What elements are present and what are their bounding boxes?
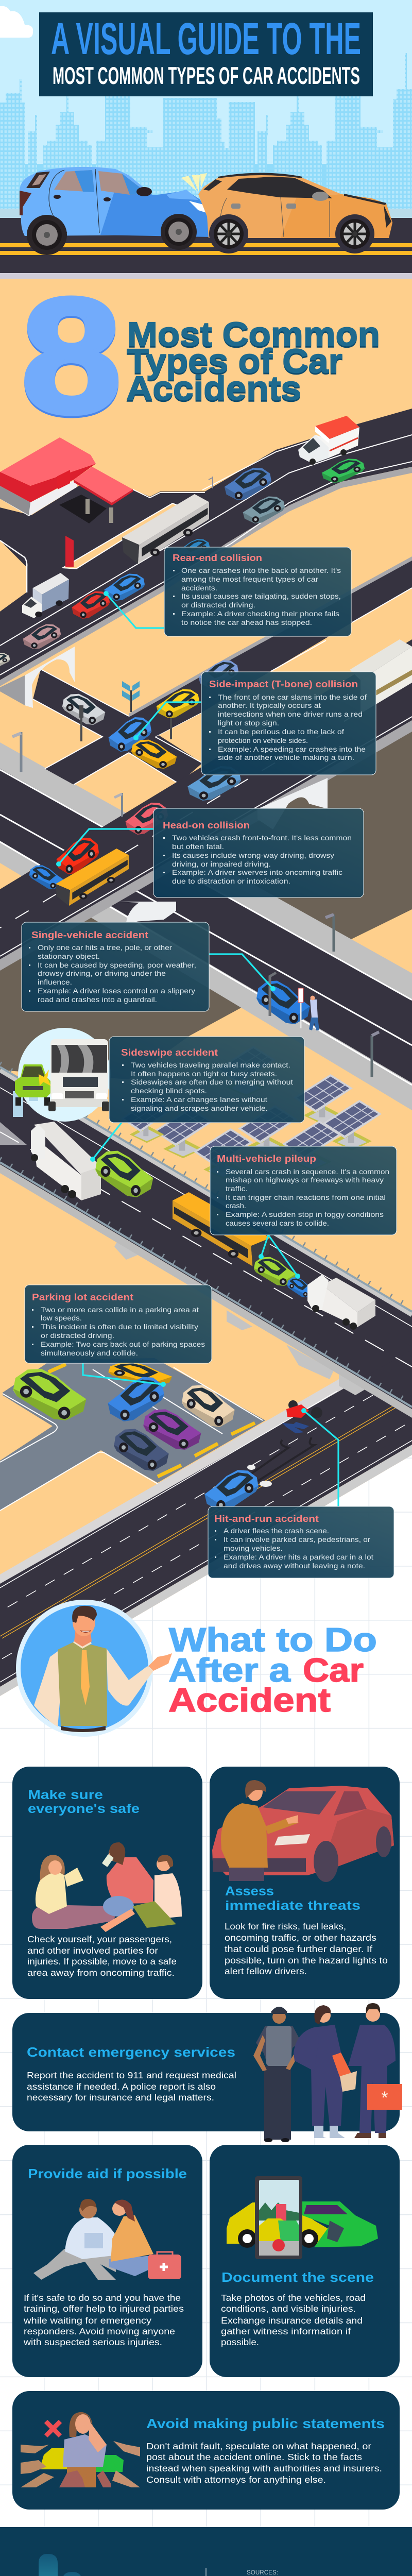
heading: What to Do After a Car Accident: Accident <box>168 1681 331 1719</box>
truck highway <box>0 1070 412 1409</box>
main elevated road <box>0 639 412 959</box>
yellow taxi <box>157 689 199 718</box>
connector end dots <box>56 591 306 1413</box>
bullet list: but often fatal. <box>172 843 224 851</box>
card title: Contact emergency services <box>27 2044 235 2060</box>
blue van lower road <box>187 766 241 801</box>
hero scene: sky, city and road <box>0 0 412 279</box>
illustration: yellow and green cars <box>227 2201 378 2248</box>
panel title: Side-impact (T-bone) collision <box>209 679 358 689</box>
card: assess immediate threats <box>210 1767 400 1999</box>
bullet list: Sideswipes are often due to merging without <box>131 1078 293 1086</box>
card: avoid making public statements <box>12 2391 400 2510</box>
person holding head <box>309 995 319 1030</box>
asphalt road <box>0 218 412 273</box>
roadside price sign <box>65 536 74 567</box>
title banner <box>39 12 373 96</box>
card text: If it's safe to do so and you have the <box>24 2293 181 2303</box>
big numeral 8: 8 <box>21 264 122 447</box>
police car <box>225 468 271 500</box>
forecourt and highway asphalt <box>0 409 412 680</box>
bullet list: and drives away without leaving a note. <box>224 1562 365 1570</box>
blue van (rear-end crash) <box>104 574 145 601</box>
first aid bag <box>367 2084 402 2110</box>
card text: Report the accident to 911 and request medical <box>27 2070 236 2080</box>
panel title: Sideswipe accident <box>121 1047 218 1058</box>
sideswipe illustration <box>13 1028 111 1122</box>
card: document the scene <box>210 2145 400 2377</box>
bullet list: A driver flees the crash scene. <box>224 1527 329 1535</box>
card title: Avoid making public statements <box>146 2416 385 2431</box>
bullet list: signaling and scrapes another vehicle. <box>131 1105 268 1112</box>
white truck (pileup) <box>307 1275 375 1330</box>
lime SUV front <box>15 1064 51 1106</box>
bullet list: Example: A sudden stop in foggy conditions <box>226 1211 384 1218</box>
heading text shadow: Accidents <box>126 370 301 409</box>
illustration: man and red car <box>212 1780 394 1882</box>
bullet list: among the most frequent types of car <box>181 575 319 583</box>
hair <box>72 1606 97 1623</box>
bullet list: protection on vehicle sides. <box>218 737 308 744</box>
bullet list: moving vehicles. <box>224 1545 283 1552</box>
navy car <box>114 1429 169 1471</box>
bullet list: Example: A driver swerves into oncoming traffic <box>172 869 342 876</box>
connector: head-on <box>59 829 153 864</box>
bullet list <box>209 693 367 761</box>
card text: with suspected serious injuries. <box>23 2337 162 2347</box>
card text <box>27 1934 177 1978</box>
panel title: Head-on collision <box>163 820 250 831</box>
gray car <box>243 497 285 523</box>
card title <box>225 1884 360 1913</box>
bullet list: drowsy driving, or driving under the <box>38 970 166 977</box>
heading text shadow: Types of Car <box>127 343 342 381</box>
green car <box>322 459 365 483</box>
fleeing blue van <box>204 1470 259 1511</box>
circle fill <box>21 1605 148 1732</box>
bullet list: crash. <box>226 1202 246 1210</box>
bullet list <box>29 944 196 1004</box>
card text: necessary for insurance and legal matters. <box>27 2092 214 2103</box>
city silhouette <box>13 1080 38 1117</box>
bullet list: simultaneously and collide. <box>41 1349 138 1357</box>
logo: RMD Law <box>38 2554 179 2576</box>
illustration: phone photographing the scene <box>255 2176 302 2259</box>
cloud <box>0 6 33 38</box>
bullet list: It can be perilous due to the lack of <box>218 728 344 736</box>
beige car <box>0 653 10 670</box>
connector: side-impact <box>136 702 201 738</box>
sky <box>0 0 412 209</box>
heading: What to Do After a Car Accident: What to Do <box>169 1621 377 1658</box>
panel: multi-vehicle pileup <box>210 1146 397 1235</box>
crashed blue car <box>256 980 310 1024</box>
bullet list: It often happens on tight or busy streets. <box>131 1070 277 1078</box>
first aid kit <box>148 2252 181 2279</box>
bullet list: It can involve parked cars, pedestrians, or <box>224 1536 371 1544</box>
store roof <box>0 437 96 486</box>
green van (sideswipe) <box>95 1151 153 1197</box>
skid marks <box>237 1437 314 1484</box>
beige car <box>182 1385 235 1427</box>
card text: Take photos of the vehicles, road <box>221 2293 366 2303</box>
bullet list: light or stop sign. <box>218 719 279 727</box>
card text: Don't admit fault, speculate on what happened, or <box>146 2441 371 2451</box>
silver car <box>62 694 105 725</box>
panel: sideswipe accident <box>109 1037 304 1123</box>
bullet list: The front of one car slams into the side of <box>218 693 367 701</box>
card text <box>27 2070 236 2103</box>
panel title: Multi-vehicle pileup <box>217 1154 316 1164</box>
blue car (pileup) <box>287 1277 313 1297</box>
card text: instead when speaking with authorities and insurers. <box>146 2463 382 2473</box>
street lamps <box>12 732 122 817</box>
yellow road lines <box>0 243 412 255</box>
single-vehicle accident scene <box>256 914 379 1077</box>
panel: single-vehicle accident <box>22 922 209 1011</box>
backdrop circle <box>18 1028 111 1122</box>
bullet list: Its causes include wrong-way driving, drowsy <box>172 852 334 859</box>
circle border <box>16 1600 153 1737</box>
bullet list: One car crashes into the back of another. It's <box>181 567 341 574</box>
card title: Assess <box>225 1884 274 1899</box>
card text: Consult with attorneys for anything else. <box>146 2475 326 2485</box>
icon: impact burst <box>181 173 207 192</box>
vest <box>58 1642 107 1726</box>
card text <box>225 1921 388 1976</box>
panel: parking lot accident <box>25 1285 212 1363</box>
bullet list: Two vehicles traveling parallel make contact. <box>131 1061 290 1069</box>
logo bars <box>39 2554 106 2576</box>
bullet list: or distracted driving. <box>41 1332 114 1340</box>
illustration: woman surrounded by reporters <box>21 2412 140 2487</box>
card title: Document the scene <box>221 2269 374 2285</box>
card text: assistance if needed. A police report is also <box>27 2081 216 2092</box>
bullet list: low speeds. <box>41 1314 82 1322</box>
hit-and-run scene <box>204 1400 322 1511</box>
bullet list: intersections when one driver runs a red <box>218 710 363 718</box>
illustration: blue car in collision <box>20 167 211 255</box>
bullet list: Several cars crash in sequence. It's a common <box>226 1168 389 1176</box>
card: contact emergency services <box>12 2003 402 2142</box>
right arm <box>107 1649 153 1706</box>
yellow car (T-bone crash) <box>131 740 177 769</box>
card text <box>23 2293 184 2347</box>
heading: What to Do After a Car Accident <box>168 1621 377 1719</box>
bullet list: Example: A driver hits a parked car in a lot <box>224 1553 373 1561</box>
card: make sure everyone's safe <box>12 1767 202 1999</box>
card title: Make sure <box>28 1788 103 1802</box>
truck road guard rails and piers <box>0 1063 412 1418</box>
map: bottom road <box>0 1350 412 1696</box>
bullet list: Example: A driver checking their phone fails <box>181 610 339 618</box>
panel: rear-end collision <box>164 547 351 636</box>
street lamp <box>209 477 213 488</box>
lamp hit by car <box>270 973 276 1016</box>
ambulance <box>298 416 359 465</box>
white articulated truck <box>31 1122 101 1200</box>
injured rider <box>282 1422 309 1433</box>
bullet list: driving, or impaired driving. <box>172 860 271 868</box>
lane lines <box>0 425 412 675</box>
card text: while waiting for emergency <box>23 2315 151 2326</box>
sidewalk strip <box>0 209 412 218</box>
bullet list <box>163 834 352 885</box>
yellow bus <box>56 849 129 906</box>
panel title: Single-vehicle accident <box>31 930 148 940</box>
collar <box>73 1637 92 1649</box>
bullet list <box>215 1527 373 1570</box>
first aid bag: * <box>381 2088 388 2108</box>
panel: head-on collision <box>153 808 364 897</box>
vehicles on the truck highway <box>31 1122 375 1330</box>
illustration: gas station <box>0 437 213 567</box>
card text: Exchange insurance details and <box>221 2315 363 2326</box>
fallen motorcycle <box>286 1400 322 1418</box>
card text: responders. Avoid moving anyone <box>24 2326 175 2336</box>
card text: possible. <box>221 2337 259 2347</box>
bullet list: Example: A speeding car crashes into the <box>218 745 366 753</box>
card text: oncoming traffic, or other hazards <box>225 1933 376 1943</box>
card text: Look for fire risks, fuel leaks, <box>225 1921 346 1931</box>
card title: immediate threats <box>225 1899 360 1913</box>
bullet list: accidents. <box>181 584 217 592</box>
parking lot <box>0 1358 265 1511</box>
big numeral 8: 8 <box>21 266 122 449</box>
panel title: Hit-and-run accident <box>214 1514 319 1524</box>
blue car behind panel <box>177 539 210 559</box>
highway side wall <box>0 467 412 686</box>
illustration: three injured people <box>32 1842 182 1932</box>
bridge pillars <box>0 647 328 922</box>
bullet list <box>122 1061 293 1112</box>
left sleeve <box>34 1650 63 1727</box>
bullet list: side of another vehicle making a turn. <box>218 754 354 761</box>
bullet list: Example: Two cars back out of parking spaces <box>41 1341 205 1348</box>
bullet list: Example: A driver loses control on a slippery <box>38 987 195 995</box>
bullet list: mishap on highways or freeways with heavy <box>226 1176 384 1184</box>
sand wedge <box>63 503 178 569</box>
bullet list: another. It typically occurs at <box>218 702 321 709</box>
connector lines <box>59 594 338 1506</box>
bullet list: due to distraction or intoxication. <box>172 877 290 885</box>
yellow bus (pileup) <box>173 1192 270 1266</box>
panel: side-impact collision <box>201 672 376 775</box>
connector: parking lot <box>83 1363 163 1384</box>
blue car <box>108 1377 164 1421</box>
bullet list: Example: A car changes lanes without <box>131 1096 267 1104</box>
city skyline <box>0 53 412 210</box>
solar panels <box>121 1046 382 1179</box>
card text: injuries. If possible, move to a safe <box>27 1956 177 1967</box>
heading text shadow <box>126 316 380 409</box>
heading text: Most Common <box>127 315 380 353</box>
bullet list: road and crashes into a guardrail. <box>38 996 157 1004</box>
road curb <box>0 273 412 279</box>
card text: and other involved parties for <box>27 1945 158 1956</box>
card text: conditions, and visible injuries. <box>221 2303 356 2314</box>
bullet list: or distracted driving. <box>181 601 255 609</box>
connector: sideswipe <box>93 1123 122 1159</box>
card: provide aid if possible <box>12 2145 202 2377</box>
card title <box>28 1788 140 1816</box>
RV on the right <box>350 639 412 714</box>
bullet list: influence. <box>38 978 72 986</box>
city bus <box>122 494 209 564</box>
vehicles at the intersection <box>12 639 412 906</box>
bullet list: to notice the car ahead has stopped. <box>181 619 312 626</box>
canopy pillars <box>85 499 113 523</box>
lower highway gray shoulder <box>0 742 412 1110</box>
sand ground of the map <box>0 279 412 1696</box>
illustration: police officer <box>253 2007 301 2142</box>
store sign <box>57 470 70 489</box>
blue van (T-bone crash) <box>109 717 151 752</box>
shadow under canopy <box>59 495 107 523</box>
card title: everyone's safe <box>28 1802 140 1816</box>
connector: multi-vehicle <box>261 1235 298 1276</box>
footer <box>0 2527 412 2576</box>
bullet list: It can trigger chain reactions from one initial <box>226 1194 386 1201</box>
heading: What to Do After a Car Accident: After a <box>168 1651 291 1689</box>
bullet list: stationary object. <box>38 953 100 960</box>
heading text shadow: Most Common <box>127 316 380 354</box>
bullet list: traffic. <box>226 1185 248 1193</box>
card text: area away from oncoming traffic. <box>27 1968 175 1978</box>
no-parking sign <box>298 988 303 1028</box>
bullet list: It can be caused by speeding, poor weather, <box>38 961 196 969</box>
green van <box>13 1369 87 1420</box>
red van (head-on crash) <box>57 838 99 874</box>
bullet list: Two vehicles crash front-to-front. It's less common <box>172 834 352 842</box>
store roof front <box>0 464 96 502</box>
bullet list: checking blind spots. <box>131 1087 207 1095</box>
illustration: male paramedic <box>348 2003 402 2138</box>
connector: hit-and-run <box>304 1411 338 1506</box>
illustration: presenter man in circle <box>16 1600 172 1737</box>
illustration: orange car in collision <box>198 173 392 253</box>
heading text <box>126 315 380 407</box>
panel: hit-and-run accident <box>208 1506 394 1578</box>
connector: single-vehicle <box>209 954 273 989</box>
icon: red X mark <box>46 2421 60 2436</box>
illustration: female paramedic <box>294 2005 357 2138</box>
card text: possible, turn on the hazard lights to <box>225 1955 388 1965</box>
street lamps <box>325 914 379 1077</box>
upper winding road <box>0 409 412 686</box>
crossing sign post <box>122 681 140 712</box>
hand with keys <box>148 1653 172 1671</box>
canopy <box>74 467 133 503</box>
pink-red car <box>126 803 168 835</box>
heading text: Accidents <box>126 369 301 407</box>
exhaust smoke <box>247 1465 272 1487</box>
connector: rear-end <box>106 594 164 628</box>
card text: that could pose further danger. If <box>225 1944 372 1954</box>
card text <box>146 2441 382 2485</box>
card text <box>221 2293 366 2347</box>
purple car <box>143 1409 201 1450</box>
delivery truck <box>22 573 69 618</box>
illustration: woman helping injured man <box>33 2199 181 2280</box>
green van (pileup) <box>254 1257 296 1286</box>
blue car (head-on crash) <box>29 865 63 889</box>
card text: gather witness information if <box>221 2326 351 2336</box>
bullet list: Its usual causes are tailgating, sudden stops, <box>181 592 341 600</box>
mauve car <box>23 624 61 649</box>
map: brown lowland <box>0 711 412 1079</box>
face <box>73 1607 95 1636</box>
neck <box>74 1628 92 1647</box>
traffic lights <box>79 703 173 741</box>
bullet list <box>32 1306 205 1357</box>
vehicles in the parking lot <box>13 1362 235 1471</box>
card text: post about the accident online. Stick to the facts <box>146 2452 362 2462</box>
bullet list: Only one car hits a tree, pole, or other <box>38 944 173 952</box>
map: road network <box>0 556 412 1409</box>
lower highway asphalt <box>0 769 412 1083</box>
heading text: Types of Car <box>127 342 342 380</box>
card text: training, offer help to injured parties <box>24 2303 184 2314</box>
panel title: Rear-end collision <box>173 553 262 563</box>
store building <box>0 479 77 516</box>
card text: alert fellow drivers. <box>225 1966 307 1976</box>
card text: Check yourself, your passengers, <box>27 1934 172 1944</box>
blue jeep <box>198 660 238 688</box>
bullet list: This incident is often due to limited visibility <box>41 1323 198 1331</box>
yellow car <box>108 1362 172 1387</box>
heading: 8 Most Common Types of Car Accidents <box>21 264 380 449</box>
card title: Provide aid if possible <box>28 2166 187 2181</box>
bullet list <box>217 1168 389 1227</box>
panel title: Parking lot accident <box>32 1292 133 1302</box>
smile <box>80 1631 91 1632</box>
vehicles on the upper highway <box>0 416 365 670</box>
tie <box>81 1650 90 1705</box>
bullet list <box>173 567 341 626</box>
bullet list: Two or more cars collide in a parking area at <box>41 1306 199 1314</box>
divider <box>205 2568 207 2576</box>
heading: What to Do After a Car Accident: Car <box>303 1651 364 1689</box>
sources list: SOURCES: <box>247 2569 278 2576</box>
white truck front <box>48 1039 109 1111</box>
bullet list: causes several cars to collide. <box>226 1219 329 1227</box>
upper connector road <box>129 560 412 737</box>
red car (rear-end crash) <box>72 591 110 619</box>
side streets <box>33 669 202 785</box>
belt <box>61 1726 106 1732</box>
